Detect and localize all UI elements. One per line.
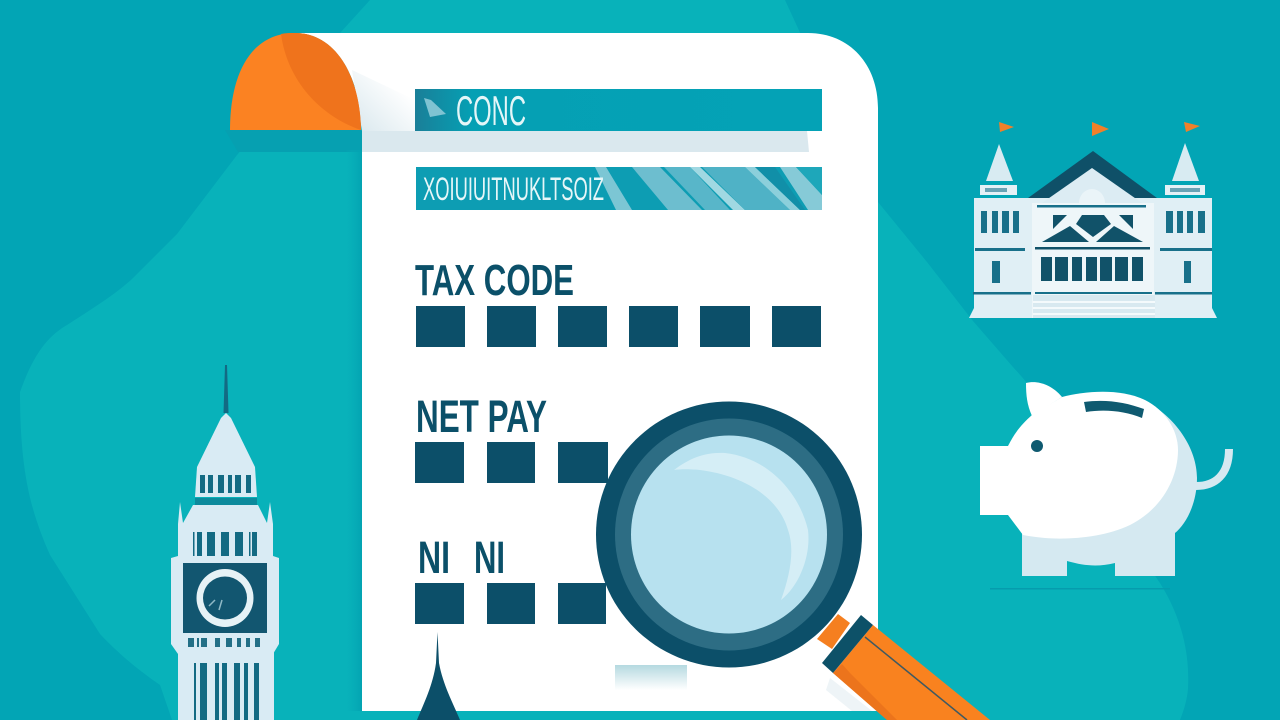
tower shoulder: [178, 502, 273, 557]
sub header text: XOIUIUITNUKLTSOIZ: [423, 171, 604, 207]
belfry windows: [200, 475, 251, 493]
clock panel: [183, 563, 267, 633]
spire: [224, 365, 228, 413]
tower shaft: [178, 650, 274, 720]
piggy bank: [980, 382, 1229, 590]
ground shadow: [990, 588, 1170, 590]
tax code boxes: [416, 306, 821, 347]
clock section: [171, 556, 279, 654]
gallery shadow strip: [195, 498, 257, 506]
handle shadow: [826, 678, 872, 711]
centre windows: [1041, 257, 1143, 281]
main roof: [1028, 151, 1157, 204]
coin slot: [1084, 401, 1144, 418]
tail: [1196, 449, 1229, 486]
orange scroll curl: [230, 33, 361, 130]
eye: [1031, 440, 1043, 452]
big ben tower: [171, 365, 279, 720]
window row: [188, 638, 260, 647]
smudge below magnifier: [615, 665, 687, 690]
turret roofs: [986, 144, 1013, 181]
pediment: [1042, 168, 1142, 203]
header bar text: CONC: [456, 87, 526, 134]
document page: [295, 33, 878, 711]
tower roof: [195, 413, 257, 497]
sub header bar with stripes: [416, 167, 822, 210]
snout: [980, 446, 1015, 515]
turret galleries: [980, 185, 1017, 195]
NI boxes: [415, 583, 606, 624]
flags: [999, 122, 1200, 136]
legs and shaded body: [1022, 398, 1197, 576]
heading: NI NI: NI: [418, 532, 450, 583]
shaft slats: [194, 663, 259, 720]
shadow below header bar: [362, 131, 809, 152]
heading: NET PAY: NET PAY: [416, 391, 547, 442]
parliament building: [969, 122, 1217, 318]
heading: NI NI: [418, 532, 505, 583]
wings and centre: [969, 198, 1217, 318]
heading: TAX CODE: TAX CODE: [415, 256, 574, 305]
wing windows and bands: [973, 211, 1212, 294]
lens highlight: [674, 453, 808, 600]
handle: [817, 614, 990, 720]
shoulder windows: [193, 532, 257, 556]
pediment arch: [1079, 189, 1105, 203]
clock face: [196, 569, 254, 627]
magnifying glass: [596, 402, 990, 720]
net pay boxes: [415, 442, 608, 483]
header bar: CONC: [415, 87, 822, 134]
lens glass: [631, 436, 827, 634]
steps: [1033, 295, 1155, 318]
ear: [1026, 382, 1062, 416]
heading: NI NI: NI: [474, 532, 505, 583]
centre ornament: [1035, 215, 1150, 250]
lens rim: [596, 402, 862, 668]
small spire at page bottom: [417, 632, 460, 720]
icon: small flag glyph: [424, 98, 446, 117]
curl shadow on page: [352, 70, 415, 131]
body: [1008, 392, 1178, 539]
